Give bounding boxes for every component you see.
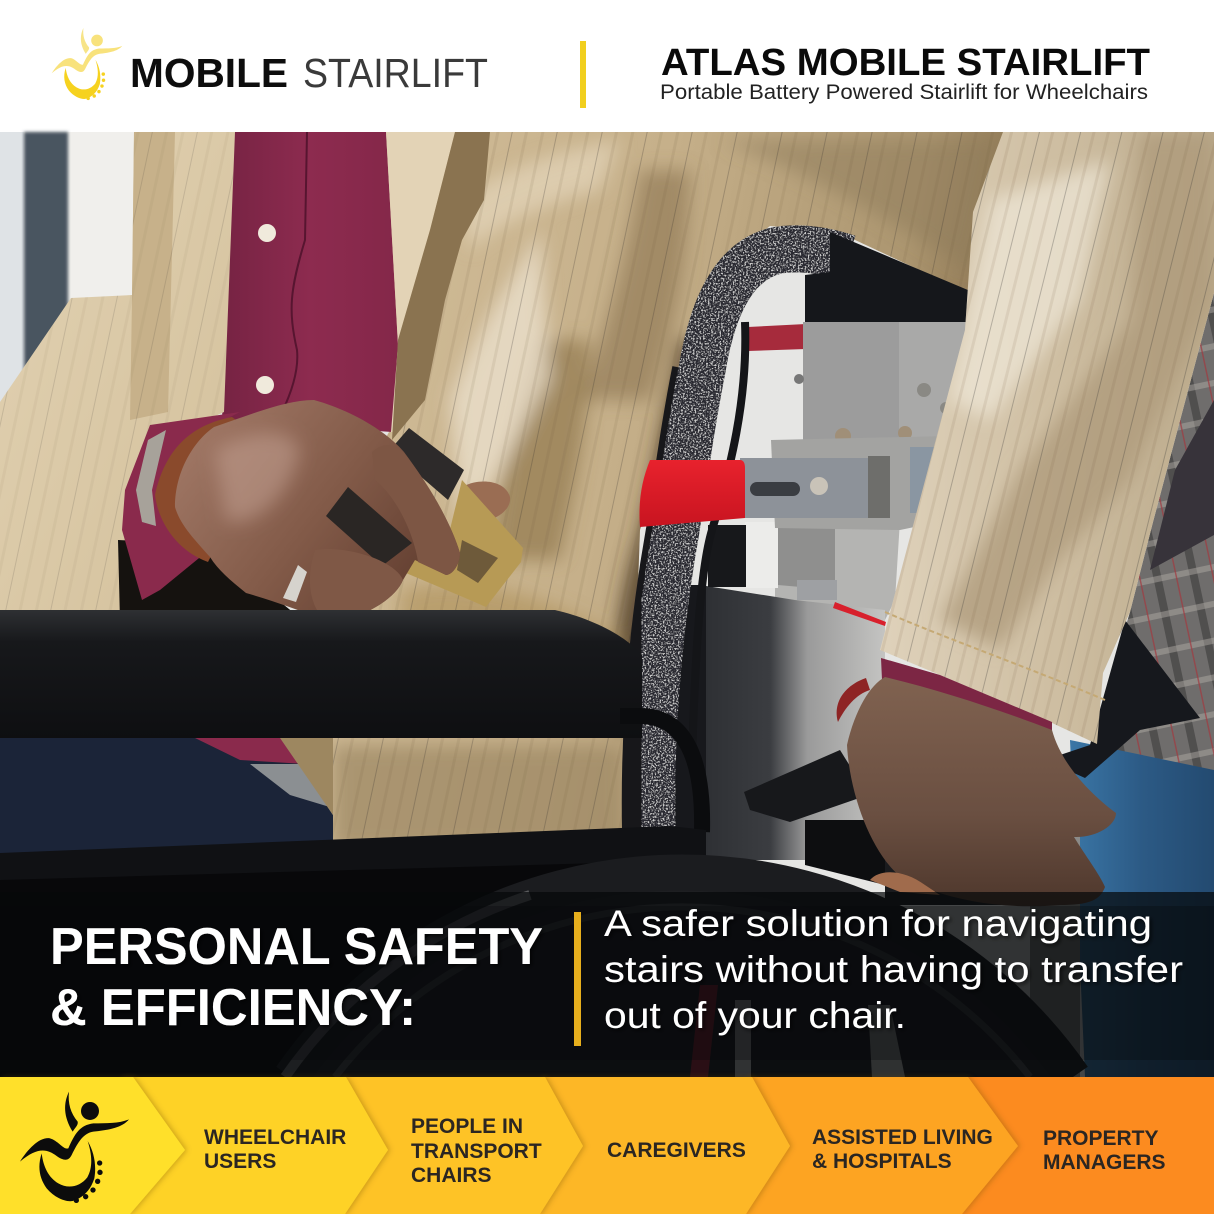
chevron: assisted living and hospitals: ASSISTED LIVING (812, 1126, 993, 1149)
armrest pad (0, 610, 642, 738)
chevron: wheelchair users (120, 1077, 388, 1214)
seat side panel (0, 826, 706, 900)
red indicator wire (833, 602, 886, 626)
shirt (222, 132, 398, 432)
wheel interior (291, 872, 1073, 1077)
caption: description (604, 903, 1183, 1036)
left jacket panel and sleeve (0, 132, 235, 610)
icon: yellow wheelchair figure (52, 28, 122, 100)
black grip (805, 232, 975, 322)
pinky finger (870, 872, 940, 895)
back column beside wheel (1030, 830, 1080, 1077)
black strap clip (744, 750, 868, 822)
lower finger (310, 549, 403, 622)
jacket folds and light (333, 132, 992, 840)
upper column (803, 322, 968, 447)
audience chevron strip (0, 1077, 1214, 1214)
product title block (660, 42, 1150, 104)
brand logo (52, 28, 488, 100)
caption: description: stairs without having to transfer (604, 949, 1183, 990)
dark under-seat area (0, 860, 706, 1077)
chevron: caregivers (540, 1077, 790, 1214)
slotted bracket arm (740, 458, 868, 518)
bracket plate (771, 436, 948, 530)
product title: ATLAS MOBILE STAIRLIFT (661, 42, 1150, 84)
photo: person in wheelchair with stairlift (0, 130, 1214, 1077)
caption: heading (50, 918, 543, 1037)
chevron: people in transport chairs: TRANSPORT (411, 1140, 542, 1163)
chevron: property managers: MANAGERS (1043, 1151, 1166, 1174)
wordmark: MOBILE (130, 50, 288, 96)
black cable (692, 322, 745, 760)
chevron: assisted living and hospitals: & HOSPITALS (812, 1150, 952, 1173)
jacket lapel (386, 132, 490, 440)
wheel tire (291, 872, 1073, 1077)
product subtitle: Portable Battery Powered Stairlift for Wheelchairs (660, 81, 1148, 104)
wheel interior details (690, 985, 905, 1077)
jeans (0, 738, 333, 860)
under-armrest backing (0, 660, 642, 738)
chevron: property managers: PROPERTY (1043, 1127, 1159, 1150)
lower buckle block (326, 487, 412, 566)
upper buckle block (390, 428, 464, 500)
shirt placket line (270, 132, 307, 430)
jeans at right (1070, 740, 1214, 1077)
chevron: people in transport chairs: PEOPLE IN (411, 1115, 523, 1138)
jacket torso (333, 132, 1003, 840)
red bracket cap (639, 460, 745, 527)
chevron: people in transport chairs (340, 1077, 583, 1214)
icon: black wheelchair figure (20, 1092, 129, 1203)
hand back (175, 400, 460, 622)
backing behind right hand (885, 835, 1048, 905)
right shirt cuff (881, 658, 1052, 735)
chevron: wheelchair users: WHEELCHAIR (204, 1126, 346, 1149)
window gap below bracket (745, 522, 778, 588)
thumb (464, 481, 510, 524)
lower jacket lapel edge (280, 738, 333, 815)
brand logo: STAIRLIFT (303, 50, 488, 96)
caption: heading: & EFFICIENCY: (50, 979, 416, 1037)
grey shirt hem (250, 764, 333, 808)
tire highlight (285, 895, 530, 1077)
caption: description: A safer solution for navigating (604, 903, 1152, 944)
wheelchair back tube (652, 249, 848, 830)
gold tongue (375, 480, 523, 607)
chevron: wheelchair users: USERS (204, 1150, 276, 1173)
chevron: caregivers: CAREGIVERS (607, 1139, 746, 1162)
shirt buttons (258, 224, 276, 242)
corrugated hose (708, 525, 746, 587)
dark caption band (0, 892, 1214, 1077)
right sleeve (850, 130, 1214, 750)
header divider (580, 41, 586, 108)
cuff seam (885, 612, 1105, 700)
dark area under cuff (118, 540, 305, 622)
frame loop (620, 716, 702, 832)
dark side panel (700, 585, 885, 860)
caption: heading: PERSONAL SAFETY (50, 918, 543, 976)
red mark on panel (837, 678, 870, 722)
chevron: assisted living and hospitals (745, 1077, 1018, 1214)
red rail (748, 324, 806, 351)
seat belt buckle and hand (175, 400, 523, 622)
chevron: people in transport chairs: CHAIRS (411, 1164, 492, 1187)
wheel rim (335, 907, 1030, 1077)
caption divider (574, 912, 581, 1046)
ring (283, 565, 307, 602)
tube shadow (642, 370, 692, 830)
plaid jacket on helper (1090, 293, 1214, 790)
chevron: logo tile (0, 1077, 185, 1214)
dark gap beside back tube (672, 585, 706, 860)
knuckle highlight (215, 433, 300, 522)
dark plaid fold (1150, 400, 1214, 570)
red shirt hem (195, 738, 305, 764)
caption: description: out of your chair. (604, 995, 906, 1036)
shirt cuff and watch strap (122, 412, 240, 600)
black under-clip block (805, 820, 885, 885)
lower column (775, 520, 900, 860)
stairlift mechanism (700, 322, 968, 860)
dark jacket cuff behind sleeve (1045, 620, 1200, 778)
index finger (372, 445, 460, 575)
chevron: property managers (960, 1077, 1214, 1214)
lapel shadow (392, 132, 490, 440)
window background (0, 132, 140, 422)
right hand (847, 677, 1116, 906)
header background (0, 0, 1214, 132)
